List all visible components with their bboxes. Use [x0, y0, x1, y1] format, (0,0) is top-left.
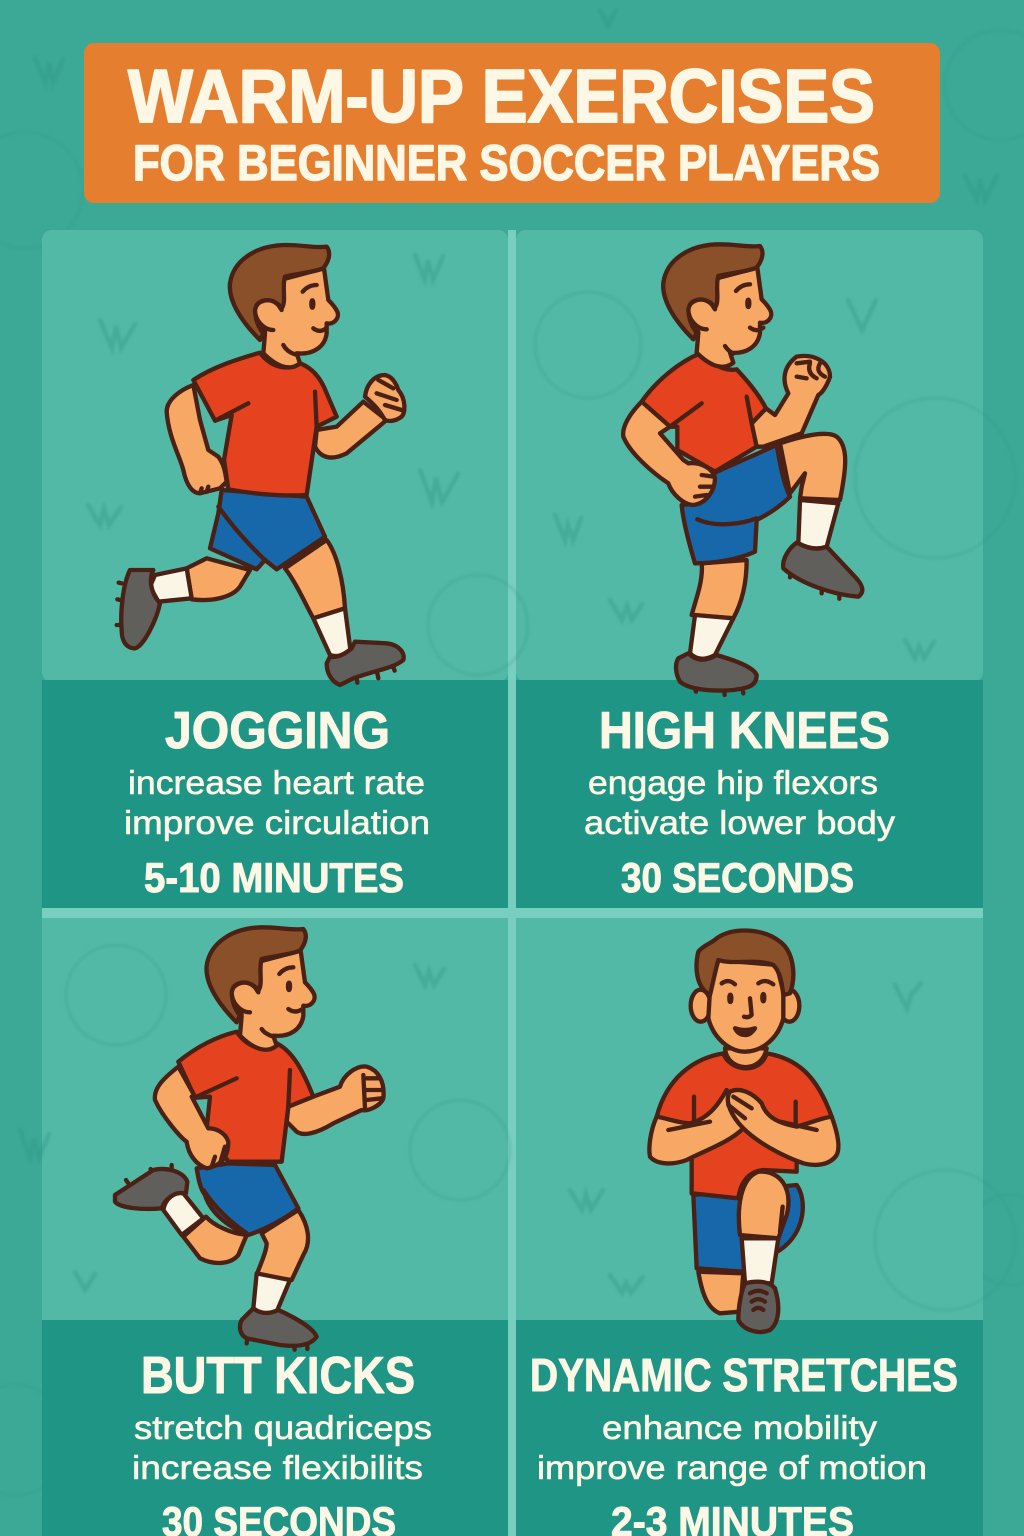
panel: jogging caption background	[42, 680, 508, 908]
benefit line 1: increase heart rate	[128, 764, 425, 801]
subtitle: FOR BEGINNER SOCCER PLAYERS	[133, 135, 880, 191]
caption: butt kicks	[132, 1347, 432, 1536]
panel: dynamic stretches illustration background	[516, 918, 983, 1322]
benefit line 2: improve range of motion	[537, 1449, 927, 1486]
heading: dynamic stretches: DYNAMIC STRETCHES	[530, 1349, 958, 1401]
caption: high knees	[584, 702, 896, 901]
duration: 30 SECONDS	[621, 854, 854, 901]
heading: high knees: HIGH KNEES	[599, 702, 890, 760]
benefit line 2: increase flexibilits	[132, 1449, 423, 1486]
illustration: boy jogging	[117, 245, 404, 685]
panel: jogging illustration background	[42, 230, 508, 682]
benefit line 1: enhance mobility	[602, 1409, 878, 1446]
heading: jogging: JOGGING	[165, 702, 390, 760]
heading: butt kicks: BUTT KICKS	[141, 1347, 415, 1405]
benefit line 1: engage hip flexors	[588, 764, 878, 801]
illustration: boy doing high knees	[623, 244, 862, 695]
benefit line 2: improve circulation	[124, 804, 430, 841]
panel: butt kicks caption background	[42, 1320, 508, 1536]
panel: dynamic stretches caption background	[516, 1320, 983, 1536]
benefit line 1: stretch quadriceps	[134, 1409, 432, 1446]
caption: jogging	[124, 702, 430, 901]
panel: butt kicks illustration background	[42, 918, 508, 1322]
illustration: boy doing butt kicks	[115, 927, 384, 1350]
caption: dynamic stretches	[530, 1349, 958, 1536]
title: WARM-UP EXERCISES	[128, 54, 875, 138]
panel: high knees illustration background	[516, 230, 983, 682]
panel: high knees caption background	[516, 680, 983, 908]
benefit line 2: activate lower body	[584, 804, 896, 841]
duration: 5-10 MINUTES	[144, 854, 404, 901]
title banner	[84, 43, 940, 203]
illustration: boy doing dynamic stretch	[649, 931, 838, 1332]
